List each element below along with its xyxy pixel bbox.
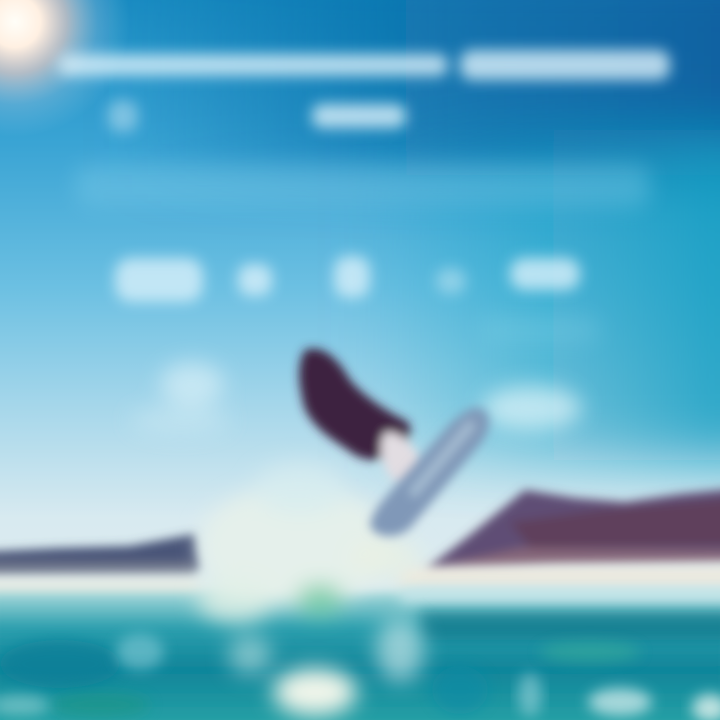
splash [197,462,424,716]
cloud left [130,362,230,434]
sun glare [0,0,130,137]
caption band [480,318,600,342]
beach [0,568,720,604]
mountains left [0,534,200,576]
subtitle text band [75,165,650,207]
title [58,50,670,132]
mountains right [425,488,720,570]
water [0,586,720,720]
kiteboard [370,408,489,536]
cloud right [482,386,582,430]
statistics row [115,256,580,302]
kiteboarder: rider [299,349,424,485]
